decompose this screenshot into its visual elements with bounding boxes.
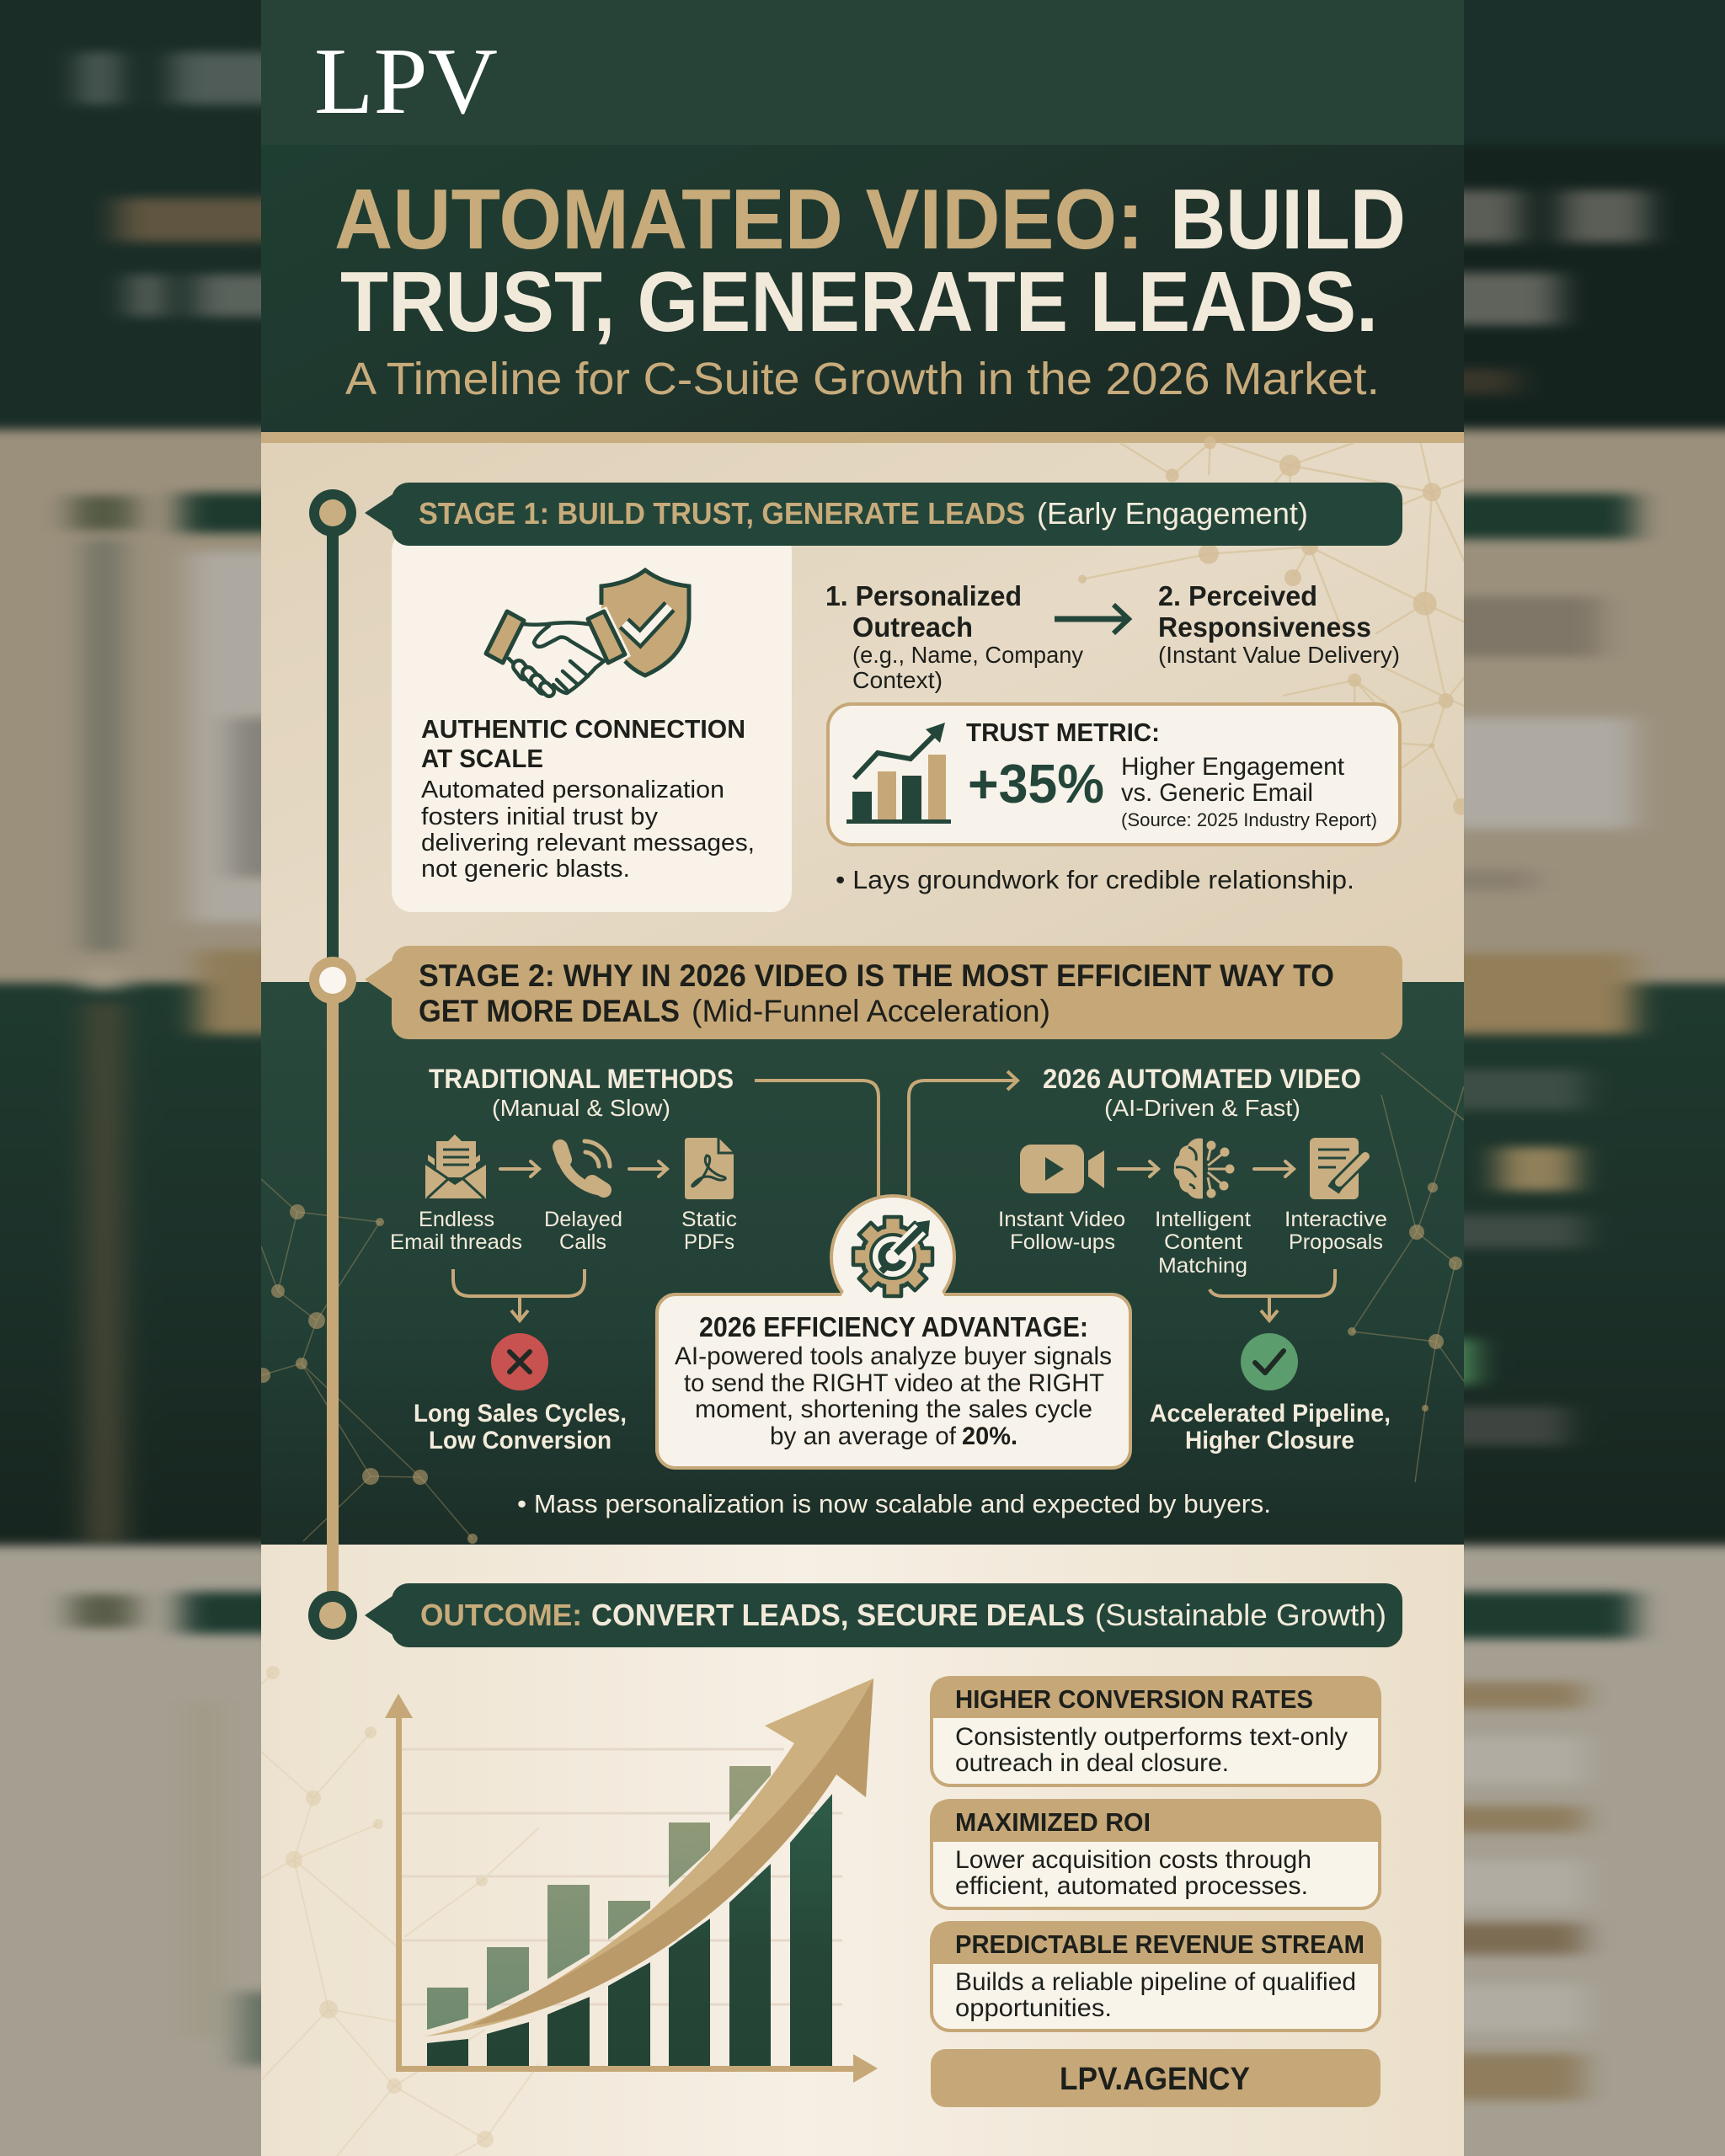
subtitle: A Timeline for C-Suite Growth in the 2026 Market. — [345, 354, 1380, 404]
icon: gear with arrow — [853, 1217, 932, 1296]
card: higher conversion rates: HIGHER CONVERSION RATES — [955, 1684, 1313, 1714]
timeline node: outcome — [308, 1591, 357, 1640]
title — [334, 173, 1406, 350]
step 1: personalized outreach: Context) — [852, 667, 943, 693]
labels: automated video: Follow-ups — [1010, 1230, 1115, 1254]
card: maximized roi: efficient, automated processes. — [955, 1872, 1308, 1900]
heading: traditional methods — [429, 1064, 734, 1121]
icon: green check — [1241, 1333, 1298, 1390]
step 2: perceived responsiveness: Responsiveness — [1158, 611, 1371, 643]
labels: traditional methods: Delayed — [544, 1208, 622, 1231]
heading: traditional methods: TRADITIONAL METHODS — [429, 1064, 734, 1094]
step 1: personalized outreach: 1. Personalized — [825, 580, 1022, 611]
text: long sales cycles: Low Conversion — [429, 1427, 611, 1454]
text: accelerated pipeline: Higher Closure — [1185, 1427, 1354, 1454]
panel: trust metric: Higher Engagement — [1121, 753, 1345, 781]
outcome banner: (Sustainable Growth) — [1095, 1598, 1386, 1632]
logo: LPV: LPV — [314, 29, 498, 134]
text: long sales cycles — [414, 1400, 627, 1454]
step 2: perceived responsiveness: 2. Perceived — [1158, 580, 1317, 611]
icon: ai brain — [1174, 1139, 1233, 1198]
chart axes — [385, 1694, 878, 2083]
arrow: phone to pdf — [629, 1161, 667, 1177]
heading: authentic connection: AUTHENTIC CONNECTION — [421, 714, 745, 744]
heading: authentic connection — [421, 714, 745, 773]
card: predictable revenue stream: PREDICTABLE REVENUE STREAM — [955, 1929, 1365, 1959]
stage 1 card — [392, 531, 792, 912]
labels: traditional methods — [390, 1208, 737, 1254]
text: authentic connection body: fosters initial trust by — [421, 803, 659, 830]
card: predictable revenue stream — [931, 1922, 1381, 2031]
stage 1 banner: STAGE 1: BUILD TRUST, GENERATE LEADS — [419, 496, 1025, 531]
card: maximized roi: MAXIMIZED ROI — [955, 1807, 1151, 1837]
arrow: growth trend — [425, 1678, 873, 2036]
outcome banner: CONVERT LEADS, SECURE DEALS — [591, 1598, 1085, 1632]
callout: efficiency advantage: to send the RIGHT video at the RIGHT — [684, 1369, 1104, 1397]
arrow: brain to document — [1254, 1161, 1294, 1177]
callout: efficiency advantage: by an average of — [770, 1422, 957, 1450]
arrow: video to brain — [1119, 1161, 1158, 1177]
text: authentic connection body: delivering relevant messages, — [421, 830, 755, 857]
title: TRUST, GENERATE LEADS. — [340, 255, 1378, 350]
panel: trust metric: TRUST METRIC: — [966, 718, 1160, 747]
labels: automated video: Instant Video — [998, 1208, 1125, 1231]
heading: automated video: 2026 AUTOMATED VIDEO — [1043, 1064, 1361, 1094]
chart: growth bars — [385, 1678, 878, 2083]
heading: traditional methods: (Manual & Slow) — [492, 1095, 670, 1121]
title: BUILD — [1170, 173, 1406, 267]
stat: +35%: +35% — [968, 753, 1104, 814]
bracket: traditional result — [453, 1269, 585, 1321]
step 1: personalized outreach — [825, 580, 1083, 693]
labels: traditional methods: Static — [681, 1208, 737, 1231]
panel: outcome — [365, 1583, 1402, 2107]
step 2: perceived responsiveness — [1158, 580, 1400, 668]
labels: automated video: Content — [1164, 1230, 1242, 1254]
labels: automated video: Interactive — [1284, 1208, 1387, 1231]
card: higher conversion rates: outreach in deal closure. — [955, 1749, 1229, 1777]
stage 1 banner — [365, 483, 1402, 546]
labels: traditional methods: PDFs — [684, 1230, 734, 1254]
panel: trust metric: (Source: 2025 Industry Report) — [1121, 809, 1377, 830]
callout: efficiency advantage: moment, shortening the sales cycle — [695, 1396, 1092, 1423]
icon: handshake and shield — [486, 570, 689, 693]
outcome banner — [365, 1583, 1402, 1647]
panel: stage 1 — [365, 483, 1402, 912]
labels: traditional methods: Email threads — [390, 1230, 522, 1254]
callout: efficiency advantage: AI-powered tools analyze buyer signals — [675, 1342, 1112, 1370]
panel: trust metric — [828, 704, 1400, 845]
stage 2 banner: STAGE 2: WHY IN 2026 VIDEO IS THE MOST EFFICIENT WAY TO — [419, 958, 1334, 993]
labels: traditional methods: Endless — [419, 1208, 494, 1231]
arrow: step 1 to step 2 — [1055, 605, 1129, 633]
arrow: envelope to phone — [500, 1161, 539, 1177]
icon: red cross — [491, 1333, 548, 1390]
icon: growth chart — [846, 723, 951, 824]
callout: efficiency advantage: 2026 EFFICIENCY ADVANTAGE: — [699, 1311, 1088, 1342]
stage 2 banner: (Mid-Funnel Acceleration) — [692, 994, 1050, 1028]
icon: proposal document — [1310, 1138, 1365, 1199]
heading: automated video: (AI-Driven & Fast) — [1104, 1095, 1300, 1121]
labels: automated video: Intelligent — [1155, 1208, 1251, 1231]
title: AUTOMATED VIDEO: — [334, 173, 1144, 267]
panel: header — [261, 0, 1464, 443]
stage 1 banner: (Early Engagement) — [1037, 496, 1308, 531]
text: authentic connection body: Automated personalization — [421, 776, 724, 803]
heading: authentic connection: AT SCALE — [421, 744, 543, 773]
card: predictable revenue stream: opportunities. — [955, 1994, 1112, 2022]
icon: video — [1020, 1145, 1104, 1193]
labels: automated video — [998, 1208, 1387, 1278]
callout: efficiency advantage: 20%. — [962, 1422, 1017, 1450]
step 1: personalized outreach: (e.g., Name, Company — [852, 642, 1083, 668]
footer button: LPV.AGENCY — [931, 2049, 1381, 2107]
step 2: perceived responsiveness: (Instant Value Delivery) — [1158, 642, 1400, 668]
icon: pdf — [685, 1138, 734, 1199]
panel: stage 2 — [365, 946, 1402, 1518]
outcome banner: OUTCOME: — [420, 1598, 582, 1632]
timeline node: stage 1 — [309, 489, 356, 536]
heading: automated video — [1043, 1064, 1361, 1121]
icon: envelope — [425, 1134, 486, 1198]
card: predictable revenue stream: Builds a reliable pipeline of qualified — [955, 1968, 1356, 1996]
labels: automated video: Matching — [1158, 1254, 1247, 1278]
card: maximized roi — [931, 1800, 1381, 1908]
text: authentic connection body — [421, 776, 755, 883]
text: long sales cycles: Long Sales Cycles, — [414, 1400, 627, 1428]
text: accelerated pipeline — [1150, 1400, 1391, 1454]
timeline — [308, 489, 357, 1640]
bracket: automated video result — [1210, 1269, 1335, 1321]
stage 2 banner — [365, 946, 1402, 1039]
panel: section backgrounds — [261, 443, 1464, 2156]
card: higher conversion rates — [931, 1677, 1381, 1785]
bullet: mass personalization: • Mass personalization is now scalable and expected by buyers. — [517, 1489, 1271, 1518]
text: accelerated pipeline: Accelerated Pipeline, — [1150, 1400, 1391, 1428]
icon: phone — [560, 1141, 610, 1191]
callout: efficiency advantage — [657, 1196, 1130, 1468]
timeline node: stage 2 — [309, 957, 356, 1004]
footer button: LPV.AGENCY: LPV.AGENCY — [1060, 2062, 1250, 2097]
stage 2 banner: GET MORE DEALS — [419, 994, 680, 1028]
text: authentic connection body: not generic blasts. — [421, 856, 630, 883]
card: higher conversion rates: Consistently outperforms text-only — [955, 1723, 1348, 1751]
labels: traditional methods: Calls — [559, 1230, 606, 1254]
panel: trust metric: vs. Generic Email — [1121, 779, 1313, 807]
card: maximized roi: Lower acquisition costs through — [955, 1846, 1311, 1874]
bullet: groundwork: • Lays groundwork for credible relationship. — [836, 865, 1354, 894]
labels: automated video: Proposals — [1289, 1230, 1383, 1254]
arrows: central connectors — [755, 1071, 1017, 1200]
step 1: personalized outreach: Outreach — [852, 611, 973, 643]
